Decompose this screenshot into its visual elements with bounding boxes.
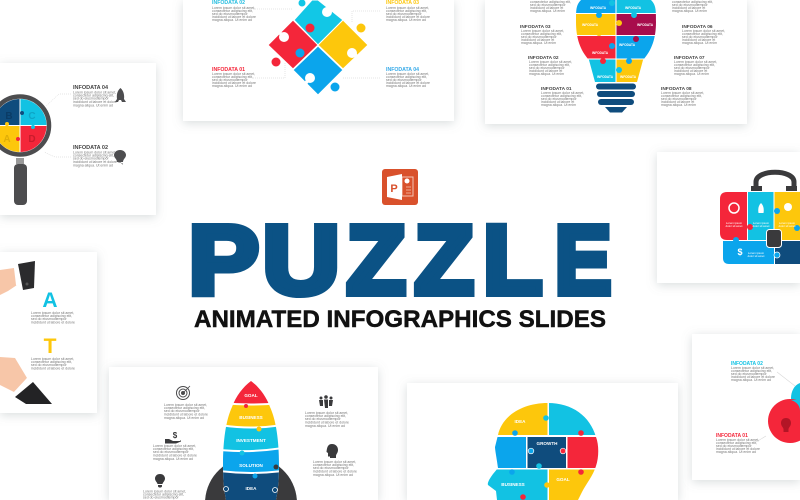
text: dollar description: sed do eiusmodtempor [153, 450, 189, 454]
text: infodata 03 [386, 0, 430, 22]
text: infodata 01: magna aliqua. Ut enim ad [212, 84, 252, 88]
text: infodata 04 [386, 67, 430, 88]
icon: clock [729, 203, 739, 213]
text: target description: sed do eiusmodtempor [164, 409, 200, 413]
text: dollar description: Lorem ipsum dolor sit amet, [153, 444, 196, 448]
text: people description: sed do eiusmodtempor [305, 417, 341, 421]
icon: hand with dollar [165, 431, 181, 444]
text: infodata 03: magna aliqua. Ut enim ad [386, 18, 426, 22]
rocket puzzle graphic: BUSINESS [239, 415, 263, 420]
light bulb puzzle graphic [576, 0, 656, 112]
text: head description: sed do eiusmodtempor [313, 466, 349, 470]
text: infodata 04: Lorem ipsum dolor sit amet, [386, 72, 429, 76]
panel: light bulb slide [485, 0, 747, 124]
briefcase puzzle graphic: Lorem ipsum [779, 221, 796, 225]
text: people description [305, 411, 349, 428]
text: bulb right column: Lorem ipsum dolor sit amet, [661, 91, 704, 95]
text: A description: incididunt ut labore et dolore [31, 320, 75, 324]
text: infodata 04: incididunt ut labore et dolore [73, 100, 117, 104]
text: bulb left column: consectetur adipiscing elit, [530, 0, 571, 4]
text: infodata 03: consectetur adipiscing elit, [386, 9, 427, 13]
icon: head [326, 444, 338, 458]
magnifier puzzle graphic: C [28, 111, 36, 122]
panel: magnifier slide [0, 63, 156, 215]
text: A description: consectetur adipiscing elit, [31, 314, 72, 318]
text: bulb left column: magna aliqua. Ut enim [521, 41, 556, 45]
text: infodata 03: sed do eiusmodtempor [386, 12, 422, 16]
text: infodata 02: consectetur adipiscing elit, [73, 154, 114, 158]
light bulb puzzle graphic: INFODATA [592, 51, 609, 55]
head puzzle graphic: IDEA [515, 419, 526, 424]
text: bulb right column: INFODATA 08 [661, 86, 692, 92]
text: infodata 02: Lorem ipsum dolor sit amet, [212, 6, 255, 10]
light bulb puzzle graphic: INFODATA [582, 23, 599, 27]
letter A: A [42, 289, 58, 312]
panel: head slide [407, 383, 678, 500]
panel: hands slide [0, 252, 97, 413]
text: infodata 02: sed do eiusmodtempor [731, 372, 767, 376]
text: bulb left column: incididunt ut labore et [529, 69, 562, 73]
text: T description: consectetur adipiscing elit, [31, 360, 72, 364]
text: bulb left column: magna aliqua. Ut enim [529, 72, 564, 76]
text: target description: incididunt ut labore et dolore [164, 412, 208, 416]
text: infodata 04: INFODATA 04 [386, 67, 419, 73]
text: bulb left column: consectetur adipiscing elit, [521, 32, 562, 36]
text: bulb description [143, 490, 186, 500]
text: bulb left column: incididunt ut labore et [530, 6, 563, 10]
icon: bottom hand and sleeve [0, 357, 52, 404]
text: bulb left column: Lorem ipsum dolor sit amet, [521, 29, 564, 33]
panel: puzzle diamond slide [183, 0, 454, 121]
text: infodata 04: sed do eiusmodtempor [386, 78, 422, 82]
icon: bulb [781, 418, 791, 432]
text: bulb right column: Lorem ipsum dolor sit amet, [682, 29, 725, 33]
text: infodata 01 [212, 67, 256, 88]
briefcase puzzle graphic: dolor sit amet [753, 224, 770, 228]
text: bulb right column: consectetur adipiscing elit, [672, 0, 713, 4]
icon: rocket [115, 88, 126, 102]
text: bulb left column [520, 0, 584, 107]
title: Z [414, 206, 474, 314]
text: bulb left column: consectetur adipiscing elit, [529, 63, 570, 67]
text: T description [31, 357, 75, 370]
text: infodata 01: consectetur adipiscing elit, [716, 441, 757, 445]
text: infodata 04: magna aliqua. Ut enim ad [73, 104, 113, 108]
text: infodata 02: magna aliqua. Ut enim ad [73, 164, 113, 168]
briefcase puzzle graphic: dolor sit amet [726, 224, 743, 228]
rocket puzzle graphic: SOLUTION [239, 463, 264, 468]
icon: PowerPoint logo [382, 169, 418, 205]
text: infodata 04: Lorem ipsum dolor sit amet, [73, 90, 116, 94]
briefcase puzzle graphic: Lorem ipsum [753, 221, 770, 225]
briefcase puzzle graphic: dolor sit amet [748, 254, 765, 258]
text: infodata 01: INFODATA 01 [212, 67, 245, 73]
text: infodata 04: consectetur adipiscing elit, [73, 94, 114, 98]
briefcase puzzle graphic: Lorem ipsum [748, 251, 765, 255]
text: T description: Lorem ipsum dolor sit amet, [31, 357, 74, 361]
icon: people [319, 395, 333, 408]
text: bulb right column: magna aliqua. Ut enim [661, 103, 696, 107]
text: infodata 02 [73, 145, 117, 168]
text: infodata 04 [73, 85, 117, 108]
text: bulb right column: magna aliqua. Ut enim [682, 41, 717, 45]
text: bulb right column: consectetur adipiscing elit, [661, 94, 702, 98]
icon: rocket [758, 203, 764, 213]
text: bulb right column: sed do eiusmodtempor [661, 97, 697, 101]
text: bulb right column: magna aliqua. Ut enim [674, 72, 709, 76]
text: bulb left column: magna aliqua. Ut enim [530, 9, 565, 13]
magnifier puzzle graphic [0, 95, 50, 205]
text: infodata 02: magna aliqua. Ut enim ad [731, 378, 771, 382]
head puzzle graphic: GOAL [556, 477, 570, 482]
icon: PowerPoint logo: P [390, 183, 398, 195]
magnifier puzzle graphic: B [5, 111, 13, 122]
text: head description: magna aliqua. Ut enim ad [313, 473, 353, 477]
text: infodata 04: consectetur adipiscing elit, [386, 75, 427, 79]
text: bulb left column: magna aliqua. Ut enim [541, 103, 576, 107]
rocket puzzle graphic: GOAL [244, 393, 258, 398]
text: target description [164, 403, 208, 420]
text: infodata 02: INFODATA 02 [73, 145, 108, 151]
text: bulb right column: incididunt ut labore et [682, 38, 715, 42]
text: bulb description: sed do eiusmodtempor [143, 496, 179, 500]
icon: bulb [155, 474, 165, 488]
text: bulb left column: sed do eiusmodtempor [521, 35, 557, 39]
text: dollar description [153, 444, 197, 461]
text: people description: consectetur adipiscing elit, [305, 414, 346, 418]
panel: circle slide [692, 334, 800, 480]
text: infodata 01: sed do eiusmodtempor [716, 444, 752, 448]
rocket puzzle graphic: INVESTMENT [236, 438, 266, 443]
text: infodata 04: incididunt ut labore et dolore [386, 81, 430, 85]
text: infodata 01: magna aliqua. Ut enim ad [716, 450, 756, 454]
text: infodata 02: incididunt ut labore et dolore [731, 375, 775, 379]
subtitle: ANIMATED INFOGRAPHICS SLIDES [194, 306, 606, 333]
text: target description: magna aliqua. Ut enim ad [164, 416, 204, 420]
text: bulb left column: Lorem ipsum dolor sit amet, [541, 91, 584, 95]
text: infodata 02: INFODATA 02 [212, 0, 245, 6]
text: target description: Lorem ipsum dolor sit amet, [164, 403, 207, 407]
title: P [188, 206, 259, 314]
text: T description: sed do eiusmodtempor [31, 363, 67, 367]
text: infodata 04: magna aliqua. Ut enim ad [386, 84, 426, 88]
text: infodata 02: INFODATA 02 [731, 361, 763, 367]
text: dollar description: incididunt ut labore et dolore [153, 454, 197, 458]
text: dollar description: magna aliqua. Ut enim ad [153, 457, 193, 461]
rocket puzzle graphic: IDEA [246, 486, 257, 491]
text: T description: incididunt ut labore et dolore [31, 366, 75, 370]
text: infodata 04: INFODATA 04 [73, 85, 109, 91]
rocket puzzle graphic [205, 378, 297, 500]
text: people description: magna aliqua. Ut enim ad [305, 424, 345, 428]
text: infodata 01: consectetur adipiscing elit, [212, 75, 253, 79]
text: bulb left column: INFODATA 01 [541, 86, 572, 92]
text: bulb left column: consectetur adipiscing elit, [541, 94, 582, 98]
briefcase puzzle graphic [720, 172, 800, 264]
circle puzzle graphic [756, 372, 800, 443]
text: bulb right column: INFODATA 06 [682, 24, 713, 30]
text: A description: sed do eiusmodtempor [31, 317, 67, 321]
text: bulb right column: incididunt ut labore et [674, 69, 707, 73]
text: bulb right column: sed do eiusmodtempor [682, 35, 718, 39]
text: infodata 01: incididunt ut labore et dolore [716, 447, 760, 451]
text: infodata 02: Lorem ipsum dolor sit amet, [73, 150, 116, 154]
icon: top hand and cuff [0, 261, 35, 295]
text: infodata 02: incididunt ut labore et dolore [73, 160, 117, 164]
icon: hand with dollar: $ [173, 431, 178, 440]
text: bulb right column: consectetur adipiscing elit, [674, 63, 715, 67]
text: infodata 02: consectetur adipiscing elit, [212, 9, 253, 13]
text: infodata 04: sed do eiusmodtempor [73, 96, 109, 100]
light bulb puzzle graphic: INFODATA [620, 75, 637, 79]
text: infodata 03: Lorem ipsum dolor sit amet, [386, 6, 429, 10]
text: bulb right column: consectetur adipiscing elit, [682, 32, 723, 36]
title: L [483, 206, 542, 314]
light bulb puzzle graphic: INFODATA [597, 75, 614, 79]
text: bulb right column [661, 0, 725, 107]
text: head description: consectetur adipiscing elit, [313, 463, 354, 467]
text: infodata 03: incididunt ut labore et dolore [386, 15, 430, 19]
text: infodata 02 [731, 361, 775, 382]
text: bulb right column: incididunt ut labore et [672, 6, 705, 10]
text: bulb left column: sed do eiusmodtempor [529, 66, 565, 70]
title: U [262, 206, 340, 314]
text: infodata 02: magna aliqua. Ut enim ad [212, 18, 252, 22]
text: target description: consectetur adipiscing elit, [164, 406, 205, 410]
letter T: T [44, 335, 57, 358]
text: A description: Lorem ipsum dolor sit amet, [31, 311, 74, 315]
briefcase puzzle graphic: dolor sit amet [779, 224, 796, 228]
text: bulb left column: INFODATA 03 [520, 24, 551, 30]
text: infodata 02: sed do eiusmodtempor [212, 12, 248, 16]
text: infodata 02 [212, 0, 256, 22]
text: infodata 01 [716, 433, 760, 454]
light bulb puzzle graphic: INFODATA [637, 23, 654, 27]
icon: target [176, 386, 190, 400]
head puzzle graphic: BUSINESS [501, 482, 525, 487]
icon: bulb [784, 203, 792, 211]
text: infodata 02: incididunt ut labore et dolore [212, 15, 256, 19]
panel: rocket slide [109, 367, 378, 500]
text: people description: Lorem ipsum dolor sit amet, [305, 411, 348, 415]
text: bulb left column: Lorem ipsum dolor sit amet, [529, 60, 572, 64]
light bulb puzzle graphic: INFODATA [625, 6, 642, 10]
text: head description [313, 460, 357, 477]
bulb base [596, 84, 636, 112]
text: infodata 01: Lorem ipsum dolor sit amet, [716, 438, 759, 442]
magnifier puzzle graphic: A [3, 134, 11, 145]
diamond puzzle graphic [268, 0, 368, 95]
text: bulb description: Lorem ipsum dolor sit amet, [143, 490, 186, 494]
text: bulb left column: sed do eiusmodtempor [541, 97, 577, 101]
text: bulb left column: sed do eiusmodtempor [530, 3, 566, 7]
text: infodata 01: incididunt ut labore et dolore [212, 81, 256, 85]
text: infodata 01: INFODATA 01 [716, 433, 748, 439]
text: bulb right column: sed do eiusmodtempor [672, 3, 708, 7]
text: infodata 01: Lorem ipsum dolor sit amet, [212, 72, 255, 76]
text: bulb right column: Lorem ipsum dolor sit amet, [674, 60, 717, 64]
text: head description: Lorem ipsum dolor sit amet, [313, 460, 356, 464]
text: people description: incididunt ut labore et dolore [305, 420, 349, 424]
text: infodata 01: sed do eiusmodtempor [212, 78, 248, 82]
icon: bulb [114, 150, 126, 165]
text: bulb right column: magna aliqua. Ut enim [672, 9, 707, 13]
light bulb puzzle graphic: INFODATA [619, 43, 636, 47]
text: infodata 02: consectetur adipiscing elit, [731, 369, 772, 373]
briefcase puzzle graphic: Lorem ipsum [726, 221, 743, 225]
text: infodata 03: INFODATA 03 [386, 0, 419, 6]
head puzzle graphic [488, 403, 598, 500]
magnifier puzzle graphic: D [28, 134, 36, 145]
text: bulb description: consectetur adipiscing elit, [143, 492, 184, 496]
light bulb puzzle graphic: INFODATA [590, 6, 607, 10]
text: dollar description: consectetur adipiscing elit, [153, 447, 194, 451]
text: bulb right column: incididunt ut labore et [661, 100, 694, 104]
icon: dollar hand: $ [737, 247, 743, 257]
title: E [555, 206, 612, 314]
text: infodata 02: Lorem ipsum dolor sit amet, [731, 366, 774, 370]
panel: briefcase slide [657, 152, 800, 283]
text: bulb right column: INFODATA 07 [674, 55, 705, 61]
text: head description: incididunt ut labore et dolore [313, 470, 357, 474]
title: Z [346, 206, 406, 314]
head puzzle graphic: GROWTH [537, 441, 558, 446]
text: bulb left column: INFODATA 02 [528, 55, 559, 61]
text: bulb right column: sed do eiusmodtempor [674, 66, 710, 70]
text: bulb left column: incididunt ut labore et [521, 38, 554, 42]
text: A description [31, 311, 75, 324]
text: infodata 02: sed do eiusmodtempor [73, 156, 109, 160]
text: bulb left column: incididunt ut labore et [541, 100, 574, 104]
